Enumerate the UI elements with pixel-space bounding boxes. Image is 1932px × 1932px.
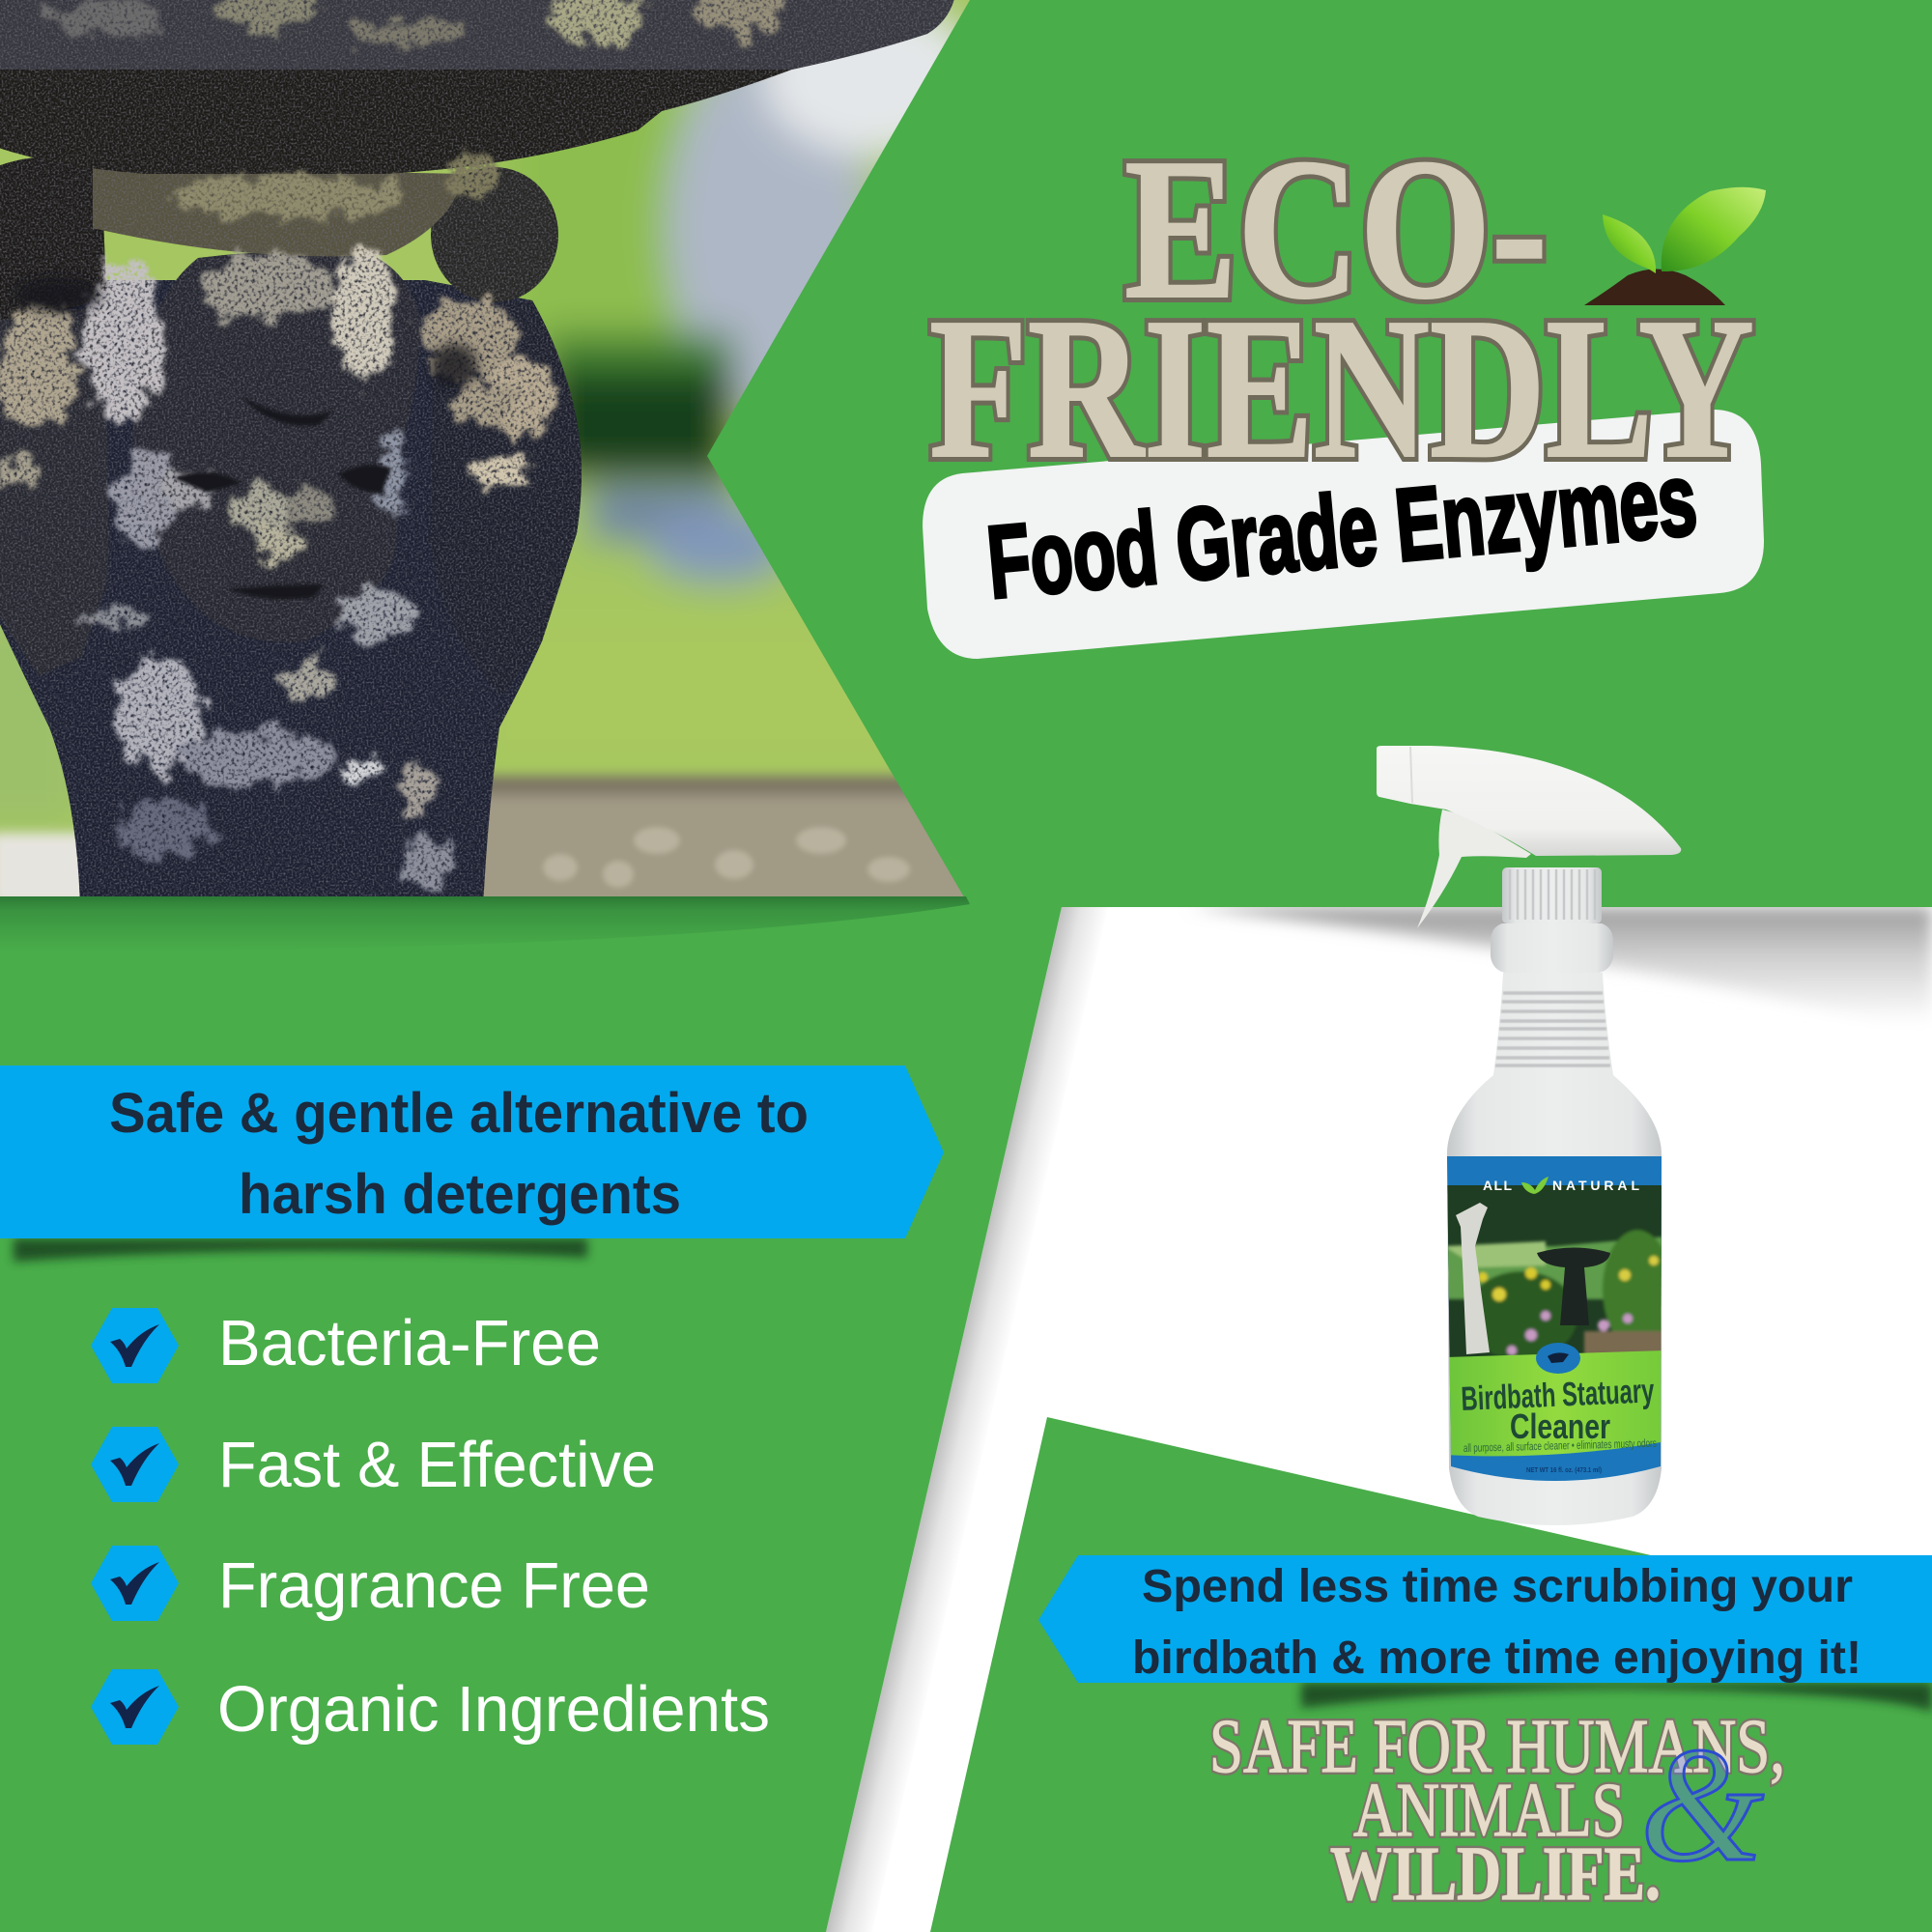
blurred garden background: [0, 0, 1014, 947]
item: Fragrance Free: Fragrance Free: [218, 1549, 650, 1622]
banner text line 2: birdbath & more time enjoying it!: [1132, 1633, 1861, 1684]
icon: seedling: [1584, 187, 1766, 305]
panel: bottom right green: [930, 1417, 1932, 1932]
trigger: [1417, 810, 1531, 928]
label birdbath: [1537, 1248, 1610, 1325]
heading: ECO-FRIENDLY: [929, 118, 1754, 500]
banner text line 2: harsh detergents: [239, 1163, 681, 1226]
photo: stone cherub birdbath statue: [0, 0, 1014, 947]
upper bowl: [0, 0, 956, 70]
head: [133, 251, 420, 642]
body and arms: [0, 280, 582, 908]
left arm tone: [0, 309, 109, 676]
arm shadow spots: [14, 277, 477, 386]
held disc: [93, 166, 464, 256]
neck ribs: [1495, 993, 1610, 1065]
ampersand: &: [1640, 1714, 1764, 1895]
lower bowl: [0, 68, 797, 174]
heading: ECO-FRIENDLY: ECO-: [1124, 118, 1548, 341]
label descriptor: all purpose, all surface cleaner • eliminates musty odors: [1463, 1436, 1657, 1455]
left hand: [0, 156, 106, 320]
item: Fast & Effective: Fast & Effective: [218, 1429, 656, 1501]
white pill: [923, 410, 1764, 659]
label garden photo: [1444, 1185, 1666, 1357]
text block: safe for humans, animals and wildlife: WILDLIFE.: [1330, 1833, 1661, 1917]
right arm tone: [532, 300, 582, 641]
text block: safe for humans, animals and wildlife: WILDLIFE.: [1330, 1833, 1661, 1917]
facial creases: [174, 396, 391, 599]
shadow: right banner: [1301, 1683, 1932, 1712]
label statue: [1456, 1203, 1490, 1354]
label headline word two: NATURAL: [1552, 1178, 1639, 1193]
label lawn and flowers: [1444, 1230, 1672, 1360]
banner text line 1: Spend less time scrubbing your: [1142, 1561, 1853, 1612]
banner: right spend less time: [1038, 1555, 1932, 1684]
text block: safe for humans, animals and wildlife: ANIMALS: [1353, 1769, 1625, 1853]
banner text line 1: Safe & gentle alternative to: [109, 1082, 809, 1145]
lichen on statue: [0, 0, 781, 893]
text block: safe for humans, animals and wildlife: SAFE FOR HUMANS,: [1209, 1705, 1785, 1789]
item: Bacteria-Free: [91, 1307, 601, 1383]
banner: left safe and gentle: [0, 1065, 944, 1238]
stone rim: [0, 776, 995, 906]
nozzle seam: [1410, 747, 1412, 803]
label bird badge: [1536, 1343, 1580, 1374]
item: Bacteria-Free: Bacteria-Free: [218, 1307, 601, 1379]
shadow: photo on left green panel: [0, 896, 970, 952]
ribbed cap: [1502, 867, 1602, 923]
statue silhouette with stone grain: [0, 0, 956, 908]
item: Organic Ingredients: Organic Ingredients: [217, 1673, 770, 1746]
label product name: Birdbath Statuary: [1461, 1372, 1656, 1418]
label bird: [1548, 1352, 1569, 1363]
text block: safe for humans, animals and wildlife: [1209, 1705, 1785, 1917]
product: spray bottle: [1377, 746, 1681, 1525]
label blue band: [1444, 1154, 1666, 1502]
sprayer head: [1377, 746, 1681, 856]
shadow: along left green panel edge: [826, 907, 1108, 1932]
label product name second line: Cleaner: [1510, 1406, 1610, 1446]
shadow: under top green panel on white: [1203, 907, 1932, 1012]
list: benefits: [91, 1307, 770, 1746]
label leaf: [1521, 1177, 1548, 1194]
collar: [1491, 923, 1613, 973]
shadow: left banner: [14, 1238, 587, 1262]
panel: top right green arrow: [707, 0, 1932, 907]
text block: safe for humans, animals and wildlife: ANIMALS: [1353, 1769, 1625, 1853]
right hand: [431, 167, 558, 302]
label net weight: NET WT 16 fl. oz. (473.1 ml): [1526, 1467, 1602, 1474]
heading: ECO-FRIENDLY: ECO-: [1124, 118, 1548, 341]
bottle body: [1447, 973, 1662, 1525]
stone rim spots: [543, 827, 910, 888]
panel: left green: [0, 896, 1062, 1932]
label headline word one: ALL: [1483, 1178, 1512, 1193]
product label: [1447, 1156, 1662, 1481]
text block: safe for humans, animals and wildlife: SAFE FOR HUMANS,: [1209, 1705, 1785, 1789]
label green band: [1444, 1350, 1666, 1456]
